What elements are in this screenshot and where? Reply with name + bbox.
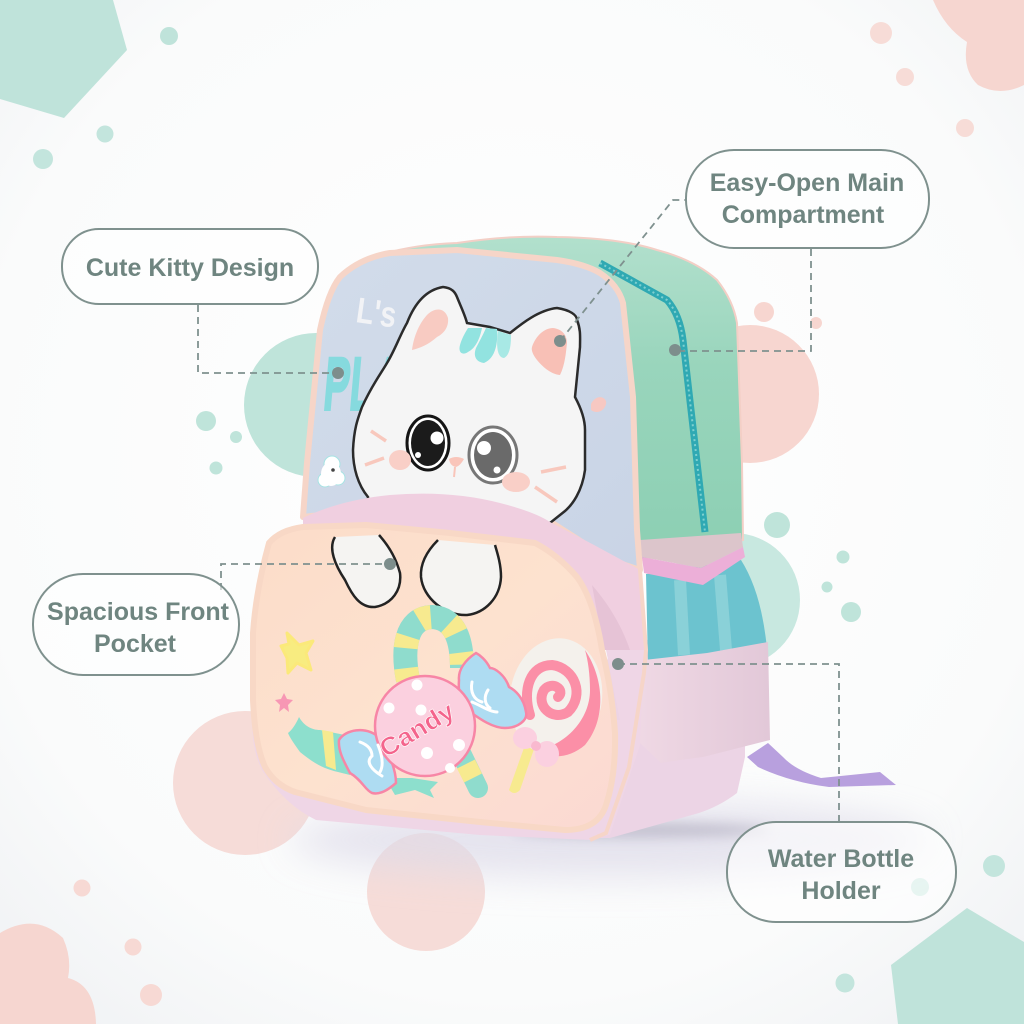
lower side body bbox=[585, 640, 745, 838]
callout: water bottle holder bbox=[612, 658, 956, 922]
green back panel bbox=[357, 237, 743, 560]
callout: spacious front pocket: Pocket bbox=[94, 630, 177, 658]
cat eyes bbox=[407, 416, 517, 483]
pocket zipper flap bbox=[303, 494, 647, 660]
panel lettering: L's bbox=[354, 289, 399, 335]
mesh pocket bbox=[640, 533, 768, 665]
backpack bbox=[252, 237, 896, 840]
cat head bbox=[353, 287, 585, 523]
cat paws bbox=[332, 535, 501, 615]
side piping bbox=[590, 530, 646, 840]
callout: easy-open main compartment: Compartment bbox=[722, 201, 885, 229]
wrapped candy bbox=[339, 653, 526, 793]
callout: spacious front pocket: Spacious Front bbox=[47, 598, 230, 626]
upper front panel bbox=[303, 250, 640, 570]
stars bbox=[275, 633, 313, 712]
callout: water bottle holder: Holder bbox=[801, 877, 881, 905]
cloud sticker bbox=[318, 456, 345, 487]
callout: easy-open main compartment bbox=[669, 150, 929, 356]
base band bbox=[252, 650, 647, 840]
callout: water bottle holder: Water Bottle bbox=[768, 845, 914, 873]
front pocket bbox=[253, 525, 615, 830]
zipper bbox=[600, 263, 705, 532]
callout: easy-open main compartment: Easy-Open Main bbox=[710, 169, 904, 197]
bottle holder bbox=[640, 642, 770, 763]
candy cane bbox=[405, 617, 478, 788]
callout: kitty ear dot and leader bbox=[554, 200, 686, 347]
lollipop bbox=[502, 632, 610, 793]
panel lettering: PLA bbox=[321, 342, 406, 427]
wrapped candy: Candy bbox=[375, 697, 459, 763]
floor tint and shadow bbox=[290, 802, 930, 878]
callout: cute kitty design bbox=[62, 229, 344, 379]
cat ears and fur bbox=[412, 309, 567, 375]
callout: spacious front pocket bbox=[33, 558, 396, 675]
strap bbox=[747, 743, 896, 787]
teal wrapped sweet bbox=[288, 717, 438, 798]
cat face bbox=[365, 431, 566, 502]
panel lettering bbox=[318, 289, 606, 487]
callout: cute kitty design: Cute Kitty Design bbox=[86, 254, 294, 282]
pocket side zipper bbox=[592, 585, 630, 650]
